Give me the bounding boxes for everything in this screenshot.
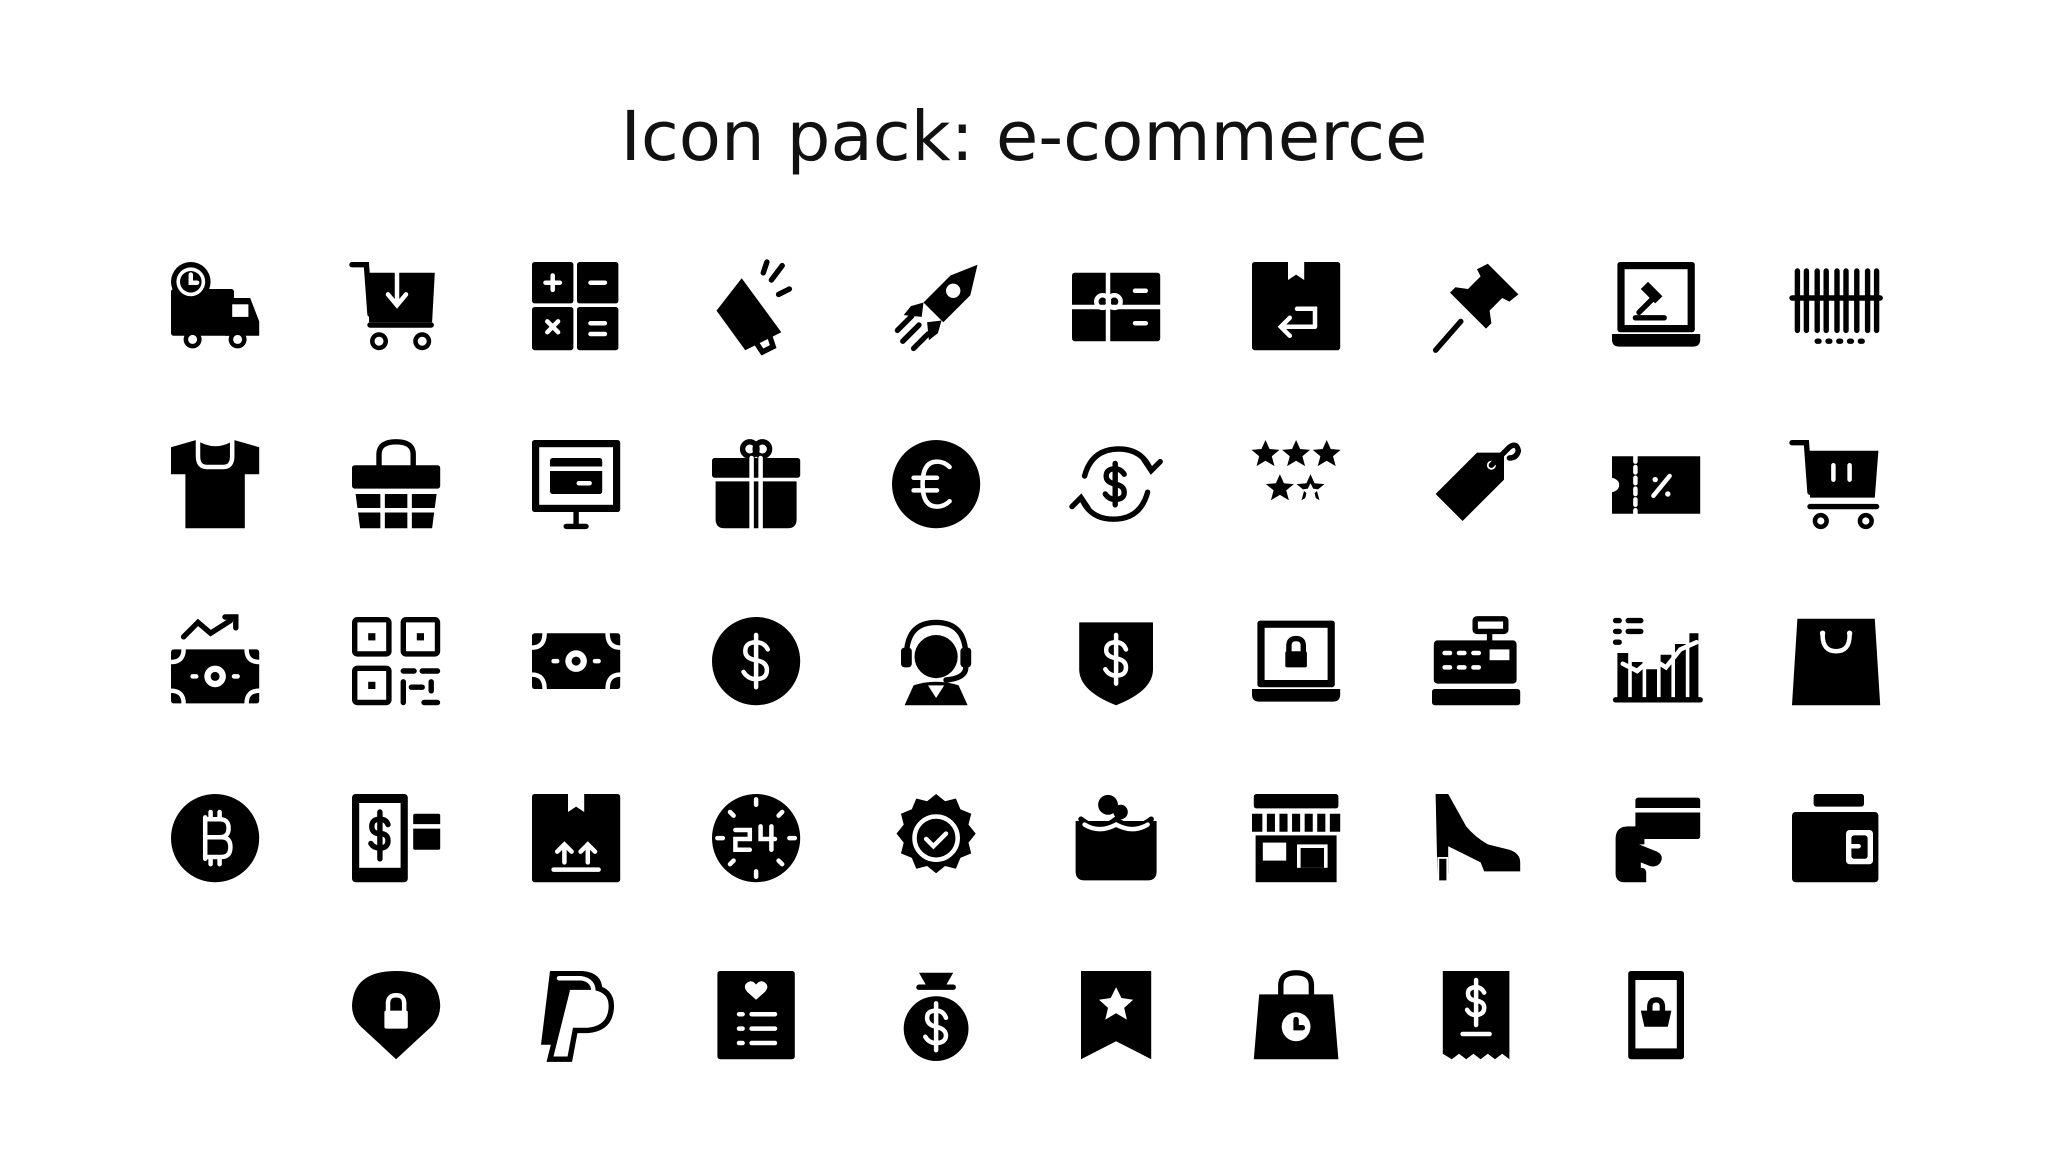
icon: shopping bag xyxy=(1792,619,1880,705)
icon: mobile payment xyxy=(352,794,440,882)
icon: basket xyxy=(352,442,440,528)
icon: hand card xyxy=(1616,798,1700,882)
icon: discount ticket xyxy=(1612,456,1700,514)
icon: gift box xyxy=(712,442,800,528)
icon: euro coin xyxy=(892,440,980,528)
icon: barcode xyxy=(1792,271,1880,341)
icon: money growth xyxy=(171,617,259,703)
icon: verified badge xyxy=(896,794,976,873)
icon: gift card xyxy=(1072,273,1160,341)
icon: star rating xyxy=(1252,440,1341,500)
icon: wallet xyxy=(1792,794,1878,882)
icon: banknote xyxy=(532,633,620,689)
icon: high heel xyxy=(1436,794,1520,882)
icon: mobile basket xyxy=(1628,971,1684,1059)
icon: coin purse xyxy=(1076,795,1157,880)
icon: monitor card xyxy=(532,440,620,526)
icon: t-shirt xyxy=(171,440,259,528)
title: Icon pack: e-commerce xyxy=(621,97,1427,177)
icon: wishlist document xyxy=(717,971,795,1059)
icon: price tag xyxy=(1436,445,1518,521)
icon: location lock xyxy=(352,971,440,1059)
icon: cash register xyxy=(1432,619,1520,705)
icon: bitcoin xyxy=(171,794,259,882)
icon: dollar coin xyxy=(712,617,800,705)
icon: box upload xyxy=(532,794,620,882)
icon: shopping cart xyxy=(1792,443,1878,529)
icon: customer support xyxy=(901,622,971,705)
icon: paypal xyxy=(541,971,611,1059)
icon: store xyxy=(1252,794,1340,882)
icon: calculator xyxy=(532,262,618,350)
icon: rocket xyxy=(897,265,978,348)
icon: qr code xyxy=(355,620,438,702)
icon: bar chart xyxy=(1616,621,1700,700)
icon: delivery truck xyxy=(171,262,259,348)
icon: 24 hours xyxy=(712,794,800,882)
icon: cart download xyxy=(352,265,435,350)
icon: dollar exchange xyxy=(1072,449,1160,519)
icon: return box xyxy=(1252,262,1340,350)
icon: bookmark star xyxy=(1081,971,1151,1059)
icon: pushpin xyxy=(1436,264,1518,350)
icon: bag clock xyxy=(1254,973,1338,1059)
icon: money bag xyxy=(904,973,968,1061)
icon: laptop lock xyxy=(1252,621,1340,702)
icon: megaphone xyxy=(716,262,789,352)
icon: laptop auction xyxy=(1612,262,1700,347)
icon: shield dollar xyxy=(1079,622,1153,705)
icon: receipt xyxy=(1443,971,1509,1059)
